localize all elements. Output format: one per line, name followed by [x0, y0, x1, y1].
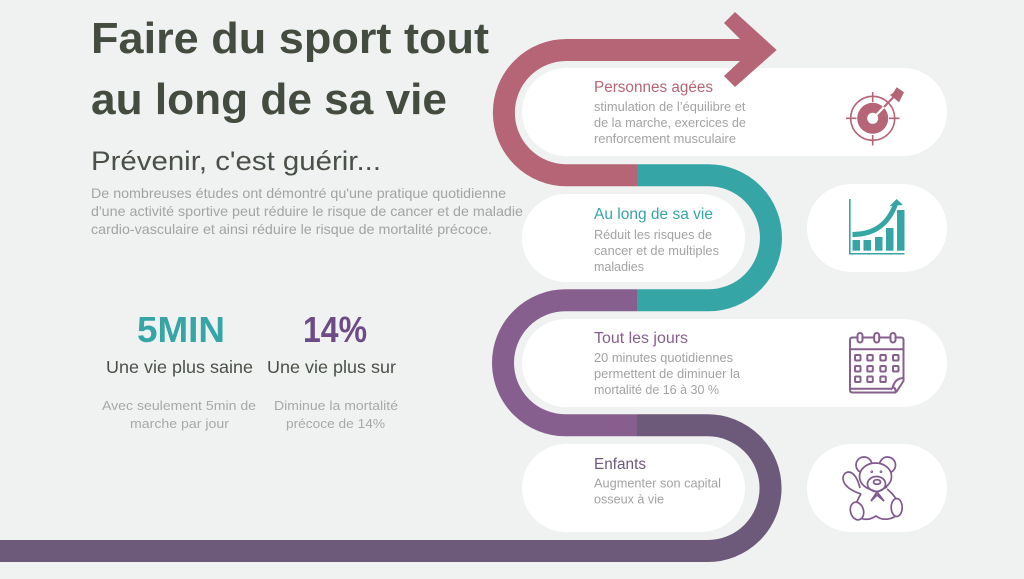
- icon: rising bar chart: [849, 199, 904, 254]
- description: personnes agees: de la marche, exercices de: [594, 116, 746, 130]
- description: tout les jours: mortalité de 16 à 30 %: [594, 383, 719, 397]
- arrow head: [724, 12, 777, 87]
- icon: calendar: [850, 333, 904, 392]
- description: personnes agees: stimulation de l’équilibre et: [594, 100, 746, 114]
- intro paragraph: [91, 185, 523, 237]
- description: au long de sa vie: [594, 228, 719, 274]
- stat description: 14 percent: précoce de 14%: [286, 416, 385, 431]
- panel: enfants: [522, 444, 947, 532]
- stat description: 5 minutes: Avec seulement 5min de: [102, 398, 256, 413]
- stat description: 14 percent: Diminue la mortalité: [274, 398, 398, 413]
- heading: tout les jours: Tout les jours: [594, 330, 688, 347]
- pill background right: [807, 444, 947, 532]
- pill background left: [522, 444, 745, 532]
- description: au long de sa vie: cancer et de multiples: [594, 244, 719, 258]
- winding path: [0, 50, 771, 551]
- description: au long de sa vie: Réduit les risques de: [594, 228, 712, 242]
- heading: personnes agees: Personnes agées: [594, 79, 713, 96]
- intro paragraph: De nombreuses études ont démontré qu'une pratique quotidienne: [91, 185, 506, 201]
- description: enfants: [594, 476, 721, 506]
- stat label: une vie plus sur: Une vie plus sur: [267, 357, 396, 377]
- heading: enfants: Enfants: [594, 456, 646, 473]
- description: personnes agees: renforcement musculaire: [594, 132, 736, 146]
- path segment: au long de sa vie: [637, 175, 771, 300]
- description: personnes agees: [594, 100, 746, 146]
- stat: 14 percent: [267, 309, 398, 431]
- stat value: 14%: 14%: [303, 309, 367, 350]
- stat label: une vie plus saine: Une vie plus saine: [106, 357, 253, 377]
- title: Faire du sport tout: [91, 14, 489, 63]
- panel: personnes agees: [522, 68, 947, 156]
- stat description: 5 minutes: marche par jour: [130, 416, 230, 431]
- stat description: 14 percent: [274, 398, 398, 431]
- description: tout les jours: permettent de diminuer la: [594, 367, 740, 381]
- panel: tout les jours: [522, 319, 947, 407]
- icon: teddy bear: [843, 457, 902, 521]
- intro paragraph: cardio-vasculaire et ainsi réduire le risque de mortalité précoce.: [91, 221, 492, 237]
- panel: au long de sa vie: [522, 184, 947, 282]
- intro paragraph: d'une activité sportive peut réduire le risque de cancer et de maladie: [91, 203, 523, 219]
- pill background: [522, 68, 947, 156]
- subtitle: Prévenir, c'est guérir...: [91, 146, 381, 176]
- path segment: tout les jours: [503, 300, 637, 425]
- stat value: 5MIN: 5MIN: [137, 309, 225, 350]
- icon: target with arrow: [846, 87, 904, 146]
- pill background right: [807, 184, 947, 272]
- pill background: [522, 319, 947, 407]
- description: tout les jours: [594, 351, 740, 397]
- pill background left: [522, 194, 745, 282]
- stat description: 5 minutes: [102, 398, 256, 431]
- heading: au long de sa vie: Au long de sa vie: [594, 206, 713, 223]
- description: tout les jours: 20 minutes quotidiennes: [594, 351, 733, 365]
- path segment: personnes agees: [504, 50, 745, 175]
- description: au long de sa vie: maladies: [594, 260, 644, 274]
- path segment: enfants: [0, 425, 771, 551]
- description: enfants: Augmenter son capital: [594, 476, 721, 490]
- description: enfants: osseux à vie: [594, 492, 664, 506]
- stat: 5 minutes: [102, 309, 256, 431]
- title: au long de sa vie: [91, 75, 447, 124]
- title: [91, 14, 489, 124]
